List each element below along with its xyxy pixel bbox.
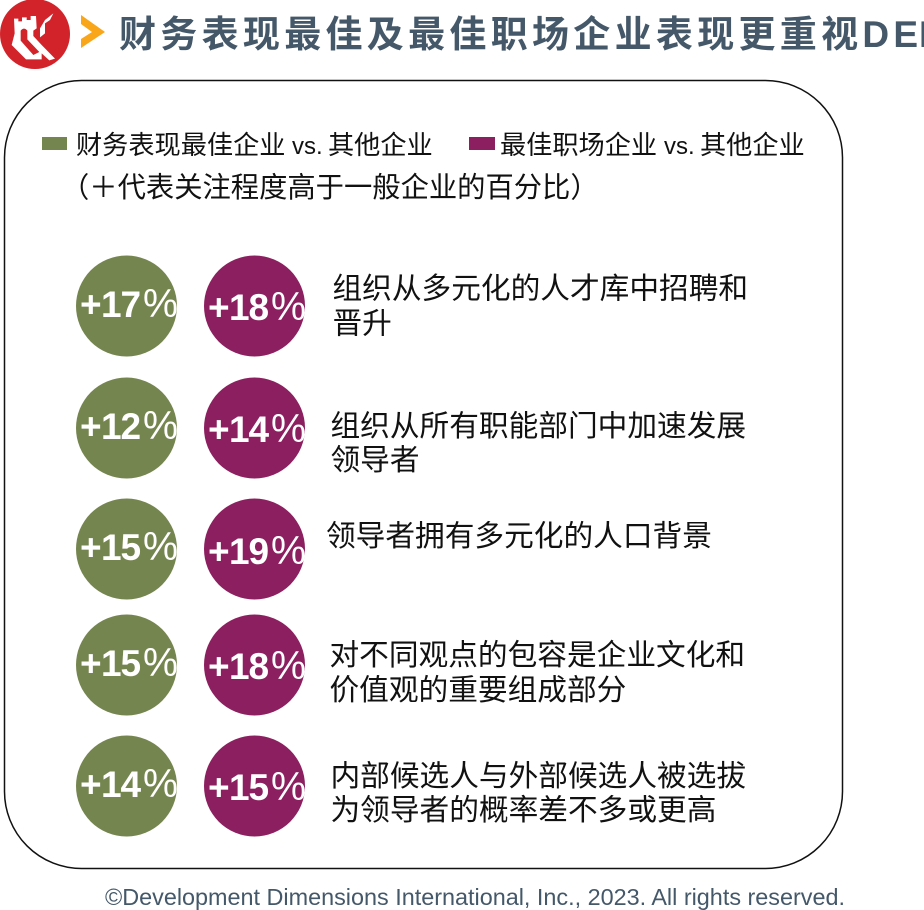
row 4: inclusive culture: % — [143, 641, 178, 685]
legend: top performers vs others: 其他企业 — [328, 130, 433, 160]
row 2: accelerating leaders: 领导者 — [330, 444, 420, 477]
row 5: internal and external candidates: +14 — [80, 764, 142, 805]
row 4: inclusive culture: 对不同观点的包容是企业文化和 — [330, 639, 745, 672]
icon: great wall logo — [0, 0, 70, 69]
row 5: internal and external candidates: 内部候选人与外部候选人被选拔 — [330, 760, 746, 793]
legend: best workplaces vs others: 其他企业 — [700, 130, 805, 160]
row 3: leader demographics: +19 — [208, 531, 269, 572]
row 3: leader demographics: % — [143, 525, 178, 569]
row 2: accelerating leaders: % — [143, 404, 178, 448]
row 5: internal and external candidates: +15 — [208, 767, 269, 808]
row 5: internal and external candidates: % — [143, 762, 178, 806]
panel: rounded container — [4, 80, 842, 868]
legend note: （＋代表关注程度高于一般企业的百分比） — [61, 171, 599, 203]
row 3: leader demographics: 领导者拥有多元化的人口背景 — [326, 520, 712, 553]
title: 财务表现最佳及最佳职场企业表现更重视DE — [119, 14, 922, 55]
row 2: accelerating leaders: +14 — [208, 409, 270, 450]
row 3: leader demographics: +15 — [80, 527, 141, 568]
row 5: internal and external candidates: % — [271, 765, 306, 809]
legend: top performers vs others — [42, 130, 433, 160]
legend: top performers vs others: vs. — [292, 133, 323, 160]
row 1: diverse talent pool: +17 — [80, 284, 141, 325]
row 4: inclusive culture: +15 — [80, 643, 141, 684]
row 1: diverse talent pool — [76, 256, 748, 356]
legend: best workplaces vs others: vs. — [664, 133, 695, 160]
row 1: diverse talent pool: 组织从多元化的人才库中招聘和 — [332, 272, 748, 306]
row 2: accelerating leaders: 组织从所有职能部门中加速发展 — [330, 410, 746, 443]
row 2: accelerating leaders — [76, 378, 746, 478]
row 4: inclusive culture: 价值观的重要组成部分 — [330, 674, 626, 707]
legend: top performers vs others: 财务表现最佳企业 — [76, 130, 286, 160]
row 1: diverse talent pool: +18 — [208, 287, 269, 328]
row 3: leader demographics: % — [271, 529, 306, 573]
copyright footer: ©Development Dimensions International, Inc., 2023. All rights reserved. — [105, 884, 845, 910]
row 1: diverse talent pool: % — [143, 282, 178, 326]
row 3: leader demographics — [76, 498, 712, 600]
row 5: internal and external candidates — [76, 736, 746, 836]
row 1: diverse talent pool: 晋升 — [332, 308, 392, 340]
row 2: accelerating leaders: +12 — [80, 406, 141, 447]
row 4: inclusive culture: +18 — [208, 646, 269, 687]
icon: orange chevron — [81, 15, 105, 48]
row 4: inclusive culture: % — [271, 644, 306, 688]
row 2: accelerating leaders: % — [271, 407, 306, 451]
row 5: internal and external candidates: 为领导者的概率差不多或更高 — [330, 794, 716, 827]
legend: best workplaces vs others — [469, 130, 805, 160]
row 1: diverse talent pool: % — [271, 285, 306, 329]
row 4: inclusive culture — [76, 614, 745, 716]
legend: best workplaces vs others: 最佳职场企业 — [500, 130, 657, 160]
